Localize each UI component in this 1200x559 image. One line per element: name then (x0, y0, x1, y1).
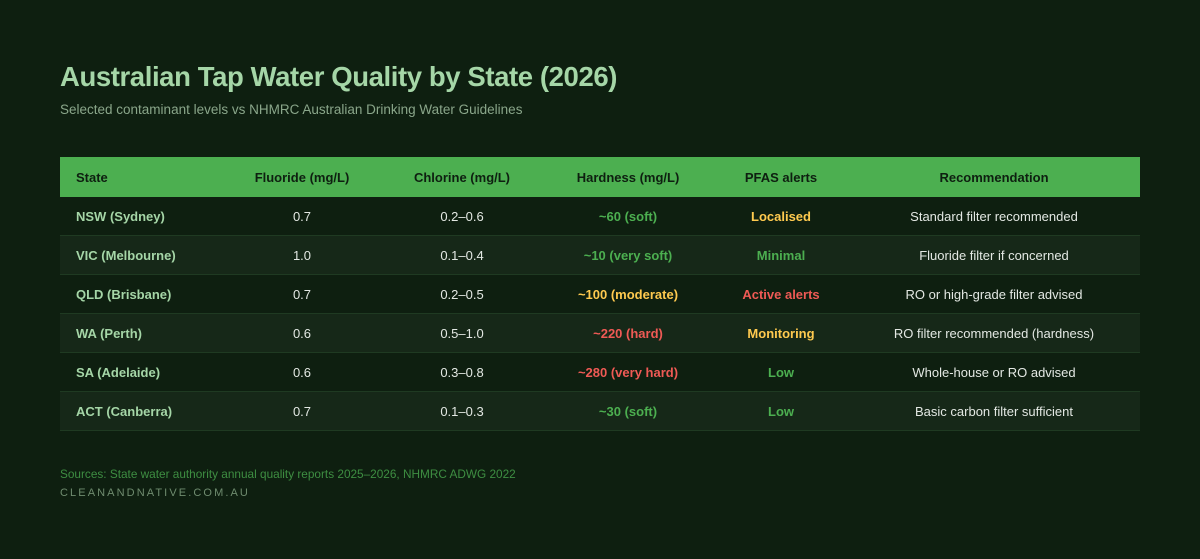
table: State (76, 170, 108, 184)
table: 0.3–0.8 (440, 364, 484, 380)
title: Australian Tap Water Quality by State (2026) (60, 61, 617, 92)
table: Chlorine (mg/L) (414, 170, 510, 184)
table: 0.2–0.6 (440, 208, 484, 224)
table: 0.5–1.0 (440, 326, 484, 340)
table: ACT (Canberra) (76, 404, 172, 418)
table: ~10 (very soft) (584, 248, 672, 262)
table: 0.1–0.3 (440, 404, 484, 418)
table: ~280 (very hard) (578, 364, 678, 380)
table: QLD (Brisbane) (76, 286, 171, 302)
table: Hardness (mg/L) (577, 170, 679, 184)
table: VIC (Melbourne) (76, 248, 176, 262)
table: 1.0 (293, 248, 311, 262)
table: Low (768, 404, 794, 418)
table: 0.6 (293, 326, 311, 340)
table: ~60 (soft) (599, 208, 657, 224)
table: 0.7 (293, 404, 311, 418)
table: Whole-house or RO advised (912, 364, 1076, 380)
table: RO or high-grade filter advised (905, 286, 1083, 302)
sources: Sources: State water authority annual quality reports 2025–2026, NHMRC ADWG 2022 (60, 467, 516, 481)
table: 0.7 (293, 208, 311, 224)
table: Basic carbon filter sufficient (915, 404, 1073, 418)
table: Monitoring (747, 326, 815, 340)
table: ~30 (soft) (599, 404, 657, 418)
table: ~220 (hard) (593, 326, 663, 340)
table: Minimal (757, 248, 805, 262)
table: Localised (751, 208, 811, 224)
table (60, 157, 1140, 431)
table: Low (768, 364, 794, 380)
table: 0.6 (293, 364, 311, 380)
table: 0.1–0.4 (440, 248, 484, 262)
table: ~100 (moderate) (578, 286, 678, 302)
footer brand: CLEANANDNATIVE.COM.AU (60, 487, 250, 499)
table: Fluoride filter if concerned (919, 248, 1069, 262)
subtitle: Selected contaminant levels vs NHMRC Australian Drinking Water Guidelines (60, 102, 522, 117)
table: Active alerts (742, 286, 820, 302)
table: 0.7 (293, 286, 311, 302)
table: Fluoride (mg/L) (255, 170, 349, 184)
table: SA (Adelaide) (76, 364, 160, 380)
table: PFAS alerts (745, 170, 817, 184)
table: 0.2–0.5 (440, 286, 484, 302)
table: RO filter recommended (hardness) (894, 326, 1094, 340)
table: Recommendation (939, 170, 1049, 184)
table: WA (Perth) (76, 326, 142, 340)
table: NSW (Sydney) (76, 208, 165, 224)
table: Standard filter recommended (910, 208, 1078, 224)
